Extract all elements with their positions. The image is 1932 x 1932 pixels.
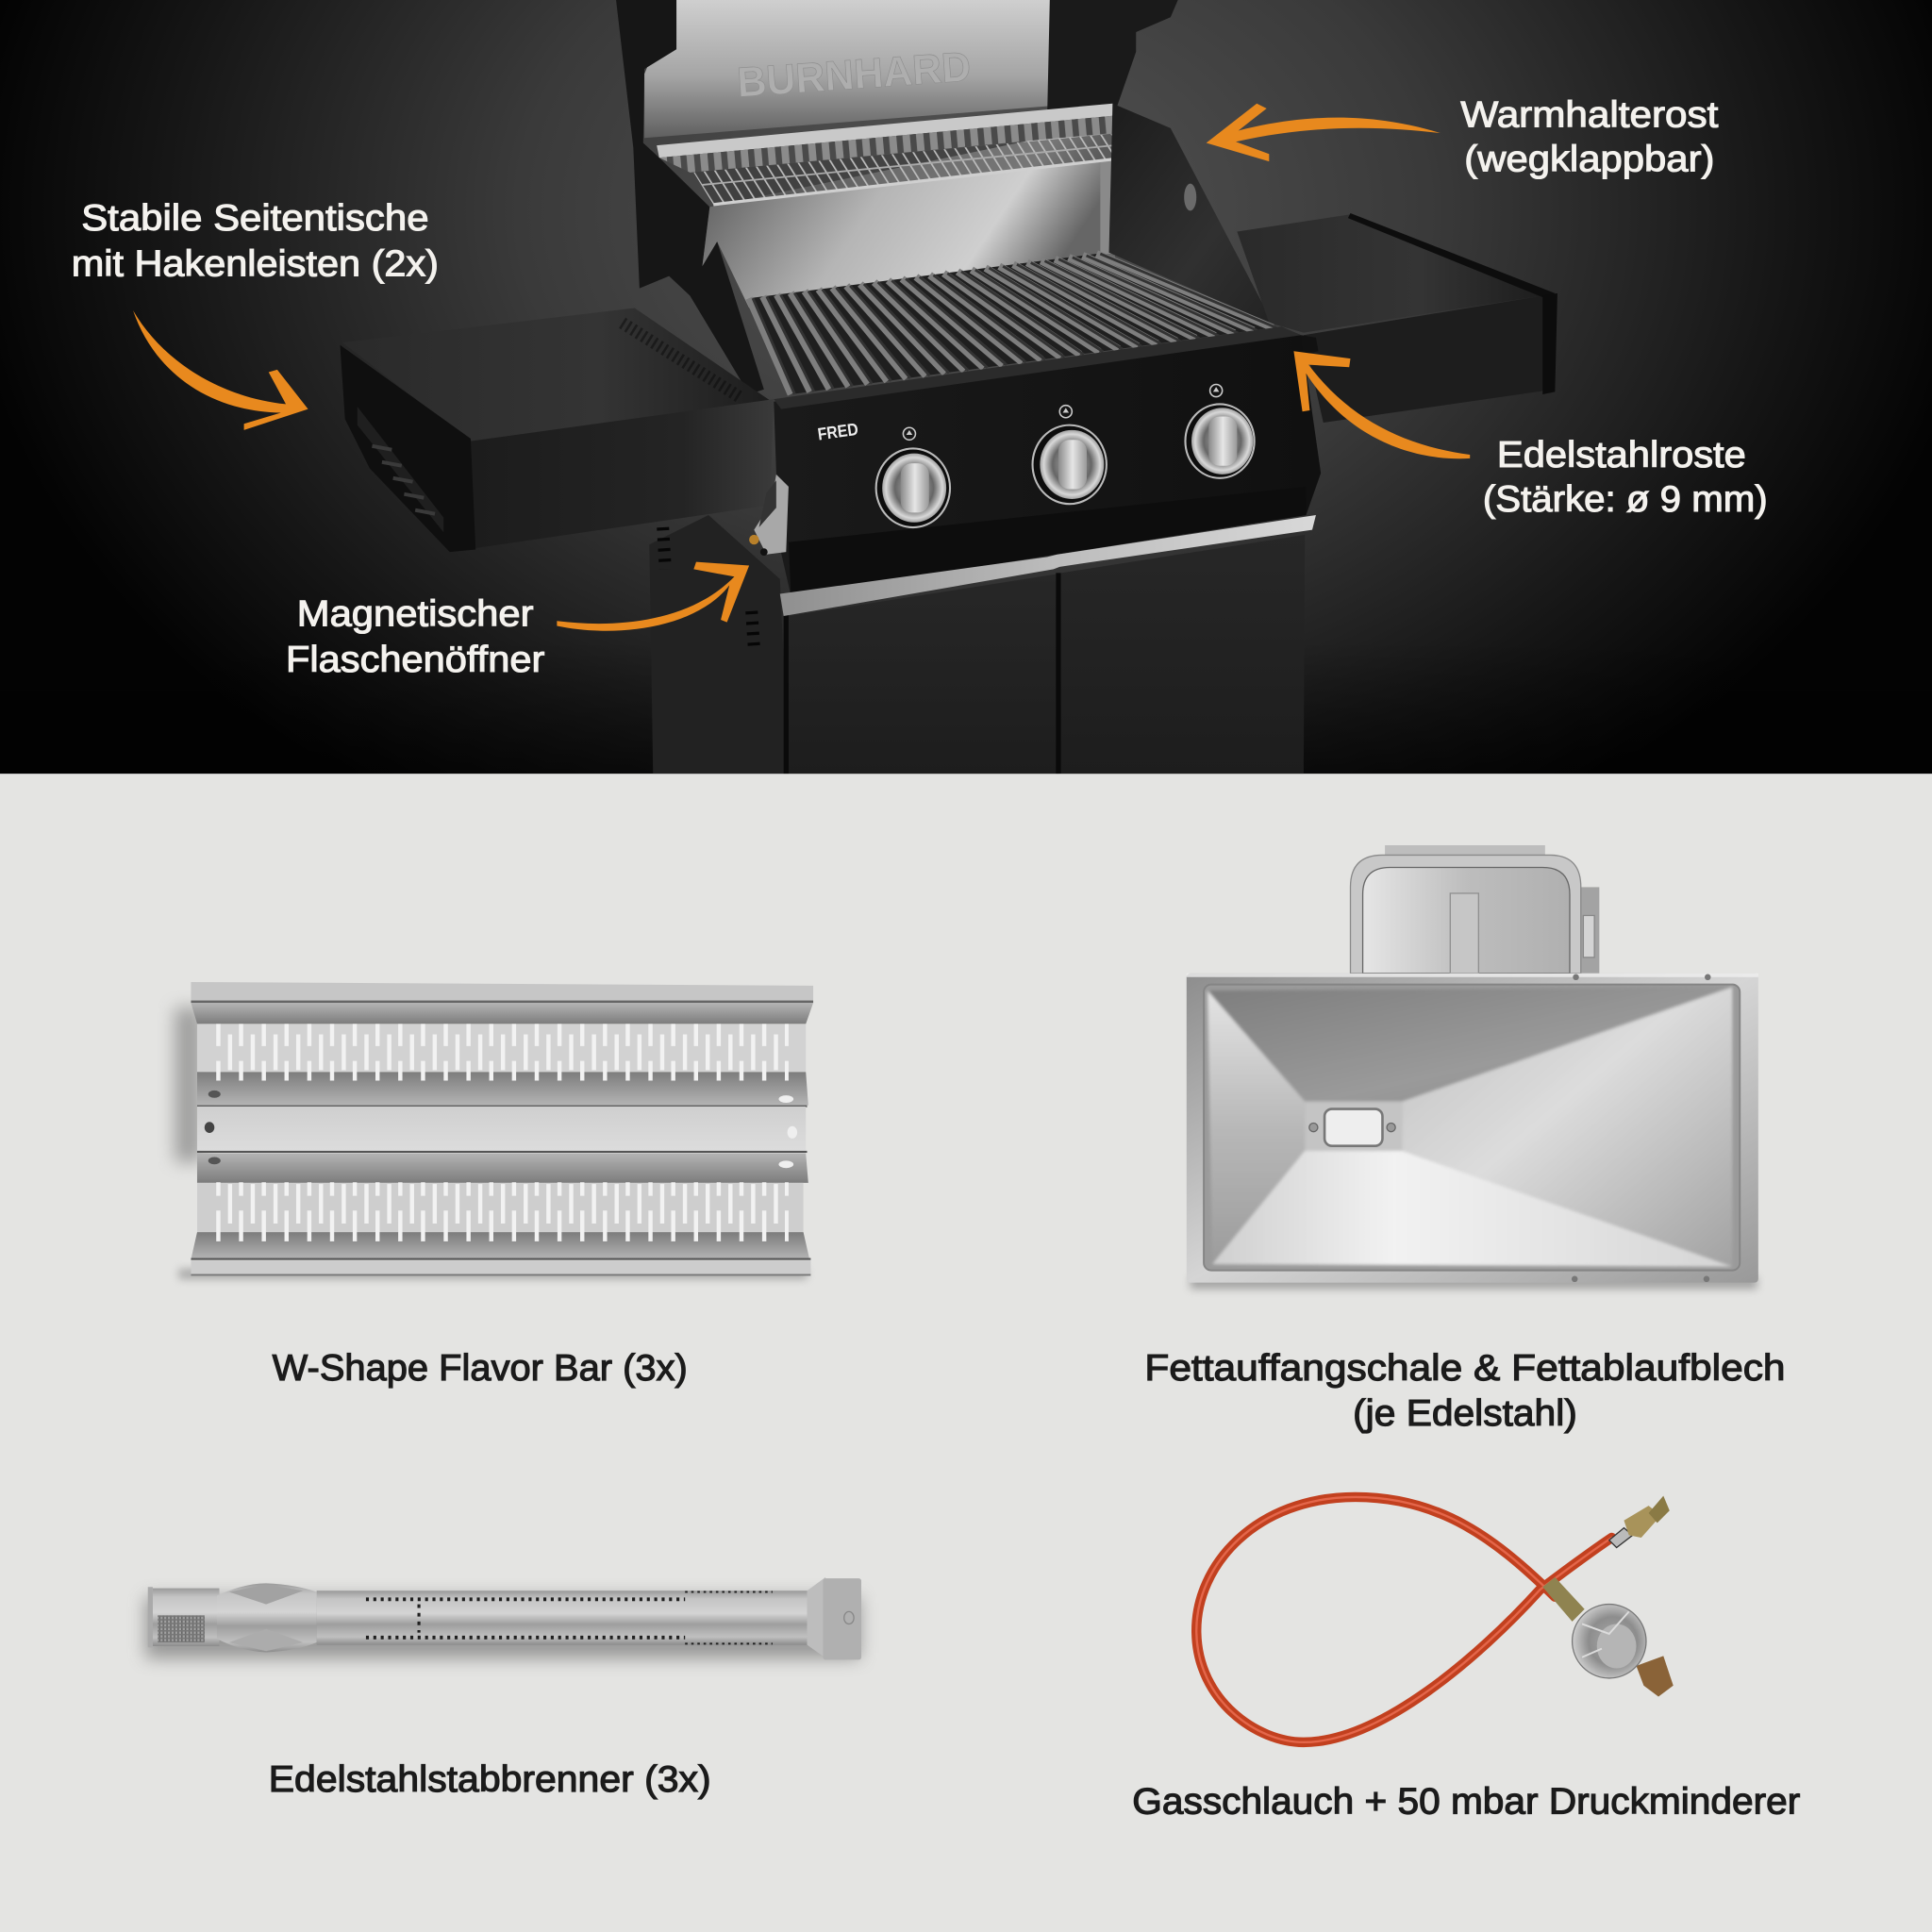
panel: dark grill photo section (0, 0, 1932, 774)
label: Edelstahlroste: (Stärke: ø 9 mm) (1483, 479, 1768, 520)
illustration: flavor bar (175, 982, 813, 1279)
label: Seitentische: mit Hakenleisten (2x) (72, 244, 439, 285)
caption: drip pan (1144, 1348, 1786, 1434)
lid right arm (1047, 0, 1178, 111)
label: Seitentische: Stabile Seitentische (81, 198, 429, 239)
grill lid interior (644, 0, 1055, 138)
cabinet side (649, 515, 789, 774)
caption: drip pan: (je Edelstahl) (1353, 1393, 1577, 1434)
caption: hose: Gasschlauch + 50 mbar Druckminderer (1132, 1782, 1800, 1823)
lid left arm (616, 0, 764, 394)
knob right (1185, 385, 1255, 478)
label: Edelstahlroste (1483, 435, 1768, 520)
label: Warmhalterost: (wegklappbar) (1464, 140, 1714, 180)
illustration: drip pan and grease tray (1187, 845, 1758, 1289)
arrow: Edelstahlroste (1293, 351, 1470, 458)
arrow: Seitentische (133, 310, 308, 430)
pan facets (1208, 987, 1732, 1267)
knob left (876, 427, 950, 527)
caption: drip pan: Fettauffangschale & Fettablaufblech (1144, 1348, 1786, 1389)
flavor bar slots (216, 1035, 789, 1226)
mid fitting (1542, 1577, 1585, 1622)
cabinet doors (784, 535, 1305, 774)
left side table (340, 308, 774, 552)
cooking grate (749, 254, 1276, 394)
label: Flaschenöffner (286, 594, 544, 680)
bottle opener (749, 475, 789, 556)
pressure regulator (1573, 1605, 1674, 1697)
label: Edelstahlroste: Edelstahlroste (1497, 435, 1746, 475)
warming rack (657, 104, 1168, 205)
label: Warmhalterost (1460, 95, 1718, 180)
right side table (1237, 213, 1557, 423)
arrow: Flaschenöffner (557, 562, 749, 631)
model name: FRED (816, 419, 859, 444)
label: Seitentische (72, 198, 439, 285)
stainless back wall (702, 124, 1115, 308)
label: Flaschenöffner: Flaschenöffner (286, 640, 544, 680)
lid embossed lettering: BURNHARD (736, 43, 973, 107)
control panel (774, 326, 1321, 596)
silver door handle strip (780, 515, 1316, 616)
illustration: stainless tube burner (145, 1577, 861, 1659)
pan rim (1187, 974, 1758, 1283)
knob middle (1033, 406, 1107, 504)
drain opening (1324, 1109, 1382, 1146)
caption: burner: Edelstahlstabbrenner (3x) (269, 1759, 711, 1800)
grease tray behind pan (1351, 845, 1599, 974)
arrow: Warmhalterost (1207, 104, 1441, 161)
label: Warmhalterost: Warmhalterost (1460, 95, 1718, 136)
caption: flavor bar: W-Shape Flavor Bar (3x) (273, 1348, 688, 1389)
top fitting (1609, 1528, 1633, 1547)
illustration: gas grill (340, 0, 1557, 774)
firebox right wall (1109, 104, 1276, 330)
label: Flaschenöffner: Magnetischer (297, 594, 534, 635)
panel: light components section (0, 774, 1932, 1932)
illustration: gas hose with regulator (1196, 1496, 1674, 1742)
